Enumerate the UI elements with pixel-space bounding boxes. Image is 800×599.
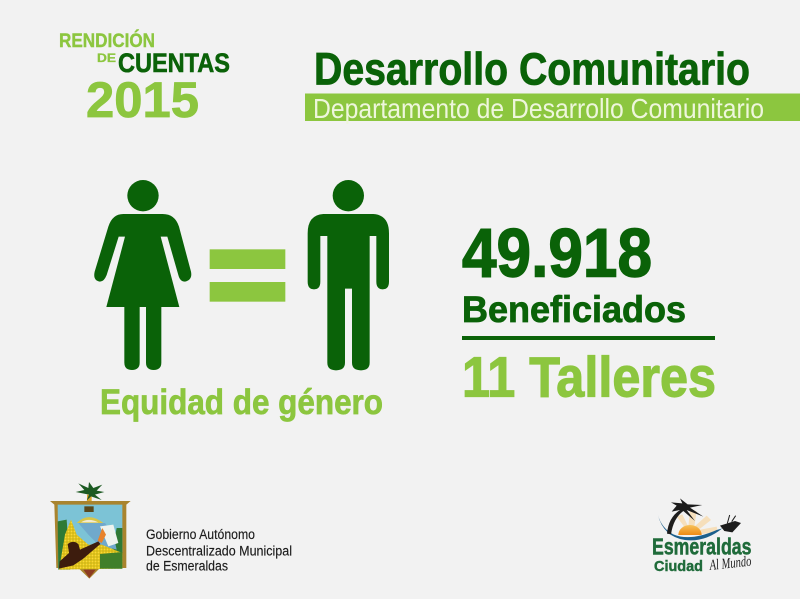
logo: Rendición de Cuentas 2015: RENDICIÓN — [59, 30, 155, 52]
statistic: workshops: 11 Talleres — [462, 346, 716, 410]
palm tree — [76, 482, 104, 503]
sun — [678, 525, 702, 535]
gender equality pictogram — [94, 180, 389, 370]
text: institution name: Descentralizado Municipal — [146, 544, 292, 558]
wave — [658, 514, 722, 540]
sun rays — [677, 510, 718, 534]
icon: man — [308, 180, 389, 370]
statistic: beneficiaries: 49.918 — [462, 214, 652, 292]
palm — [667, 498, 703, 534]
icon: woman — [94, 180, 191, 370]
icon: equals sign — [210, 249, 285, 302]
logo: Esmeraldas Ciudad Al Mundo — [652, 498, 753, 575]
logo: Rendición de Cuentas 2015 — [59, 30, 230, 128]
text: Ciudad: Ciudad — [654, 559, 703, 575]
shield frame — [50, 501, 131, 579]
text: institution name: de Esmeraldas — [146, 558, 228, 574]
crest: municipal coat of arms — [50, 482, 131, 579]
shield field — [58, 505, 122, 570]
text: institution name: Gobierno Autónomo — [146, 527, 255, 542]
text: institution name — [146, 527, 292, 574]
logo: Rendición de Cuentas 2015: 2015 — [86, 72, 199, 128]
statistic: beneficiaries: Beneficiados — [462, 289, 686, 330]
text: Al Mundo: Al Mundo — [708, 554, 753, 574]
text: Esmeraldas: Esmeraldas — [652, 534, 752, 560]
boat — [720, 521, 741, 532]
caption: Equidad de género: Equidad de género — [100, 383, 383, 422]
statistic: beneficiaries — [462, 214, 686, 330]
divider line — [462, 336, 715, 340]
crest ornament — [84, 506, 94, 512]
logo: Rendición de Cuentas 2015: CUENTAS — [118, 48, 230, 78]
logo: Rendición de Cuentas 2015: DE — [97, 51, 116, 65]
